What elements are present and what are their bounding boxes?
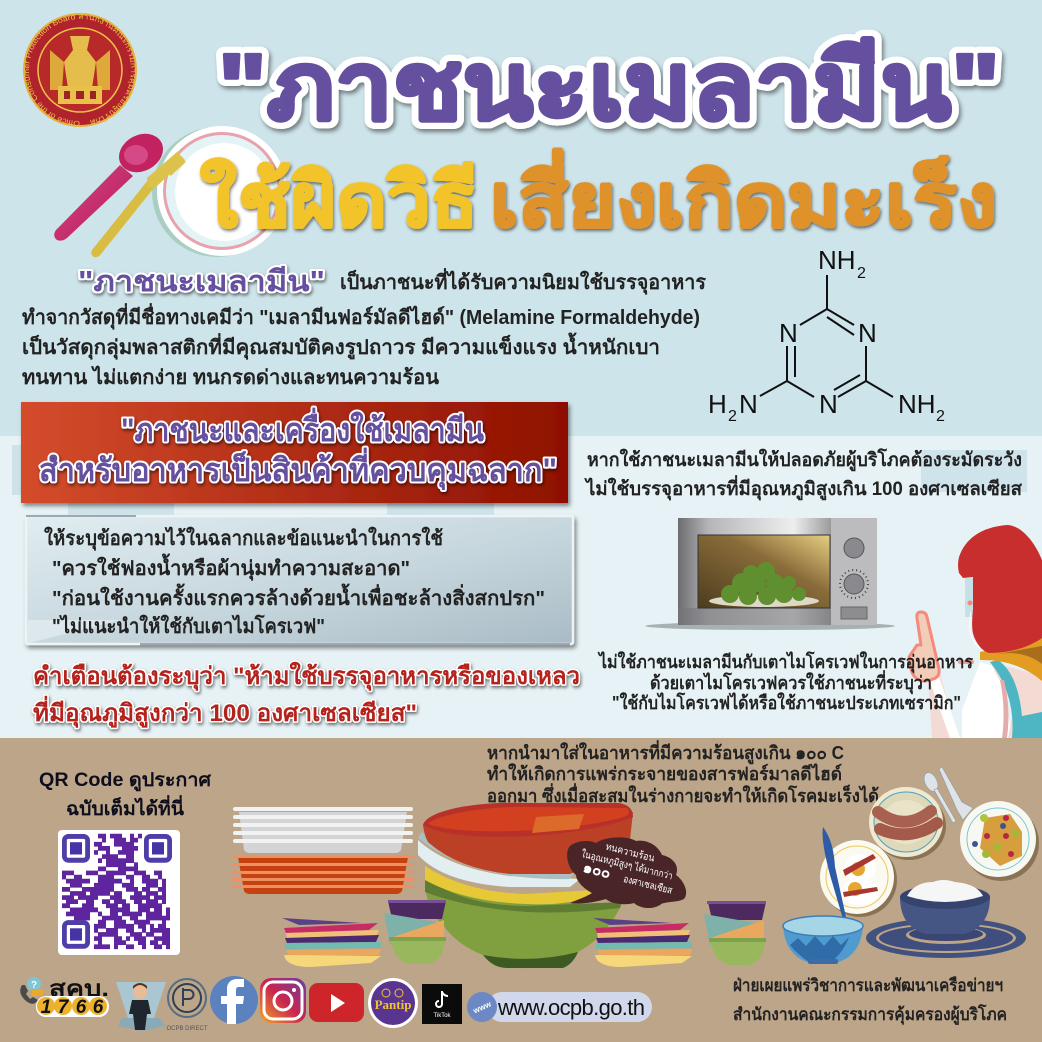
chart: melamine chemical structure: 2 — [728, 408, 737, 425]
chart: melamine chemical structure: N — [739, 389, 758, 419]
panel: red heading: สำหรับอาหารเป็นสินค้าที่ควบคุมฉลาก" — [39, 447, 557, 491]
icon: mascot man — [116, 982, 166, 1031]
chart: melamine chemical structure — [708, 245, 945, 425]
title: melamine ware: "ภาชนะเมลามีน" — [218, 34, 1000, 139]
illustration: cutlery — [921, 767, 973, 823]
panel: red heading: "ภาชนะและเครื่องใช้เมลามีน — [121, 407, 484, 448]
logo: consumer protection board seal: Office of the Consumer Protection Board สำนักงานคณะกรรมการคุ้มครองผู้บริโภค — [25, 13, 136, 126]
intro text block: ทนทาน ไม่แตกง่าย ทนกรดด่างและทนความร้อน — [22, 365, 439, 389]
illustration: rice bowl — [900, 880, 990, 934]
hotline number 1766 — [36, 996, 109, 1018]
background: top band — [0, 0, 1042, 436]
QR code — [58, 830, 180, 955]
hotline number 1766: 6 — [76, 997, 87, 1018]
illustration: large bowl stack — [418, 803, 633, 968]
illustration: blue spoon — [823, 827, 846, 919]
chart: melamine chemical structure: N — [858, 318, 877, 348]
footer: department credit: ฝ่ายเผยแพร่วิชาการและพัฒนาเครือข่ายฯ — [733, 975, 1003, 995]
caption: microwave advice — [597, 651, 973, 713]
warning text — [33, 661, 580, 729]
caption: microwave advice: ไม่ใช้ภาชนะเมลามีนกับเตาไมโครเวฟในการอุ่นอาหาร — [597, 651, 973, 674]
background: middle band — [0, 436, 1042, 738]
icon: Instagram — [260, 978, 306, 1023]
hotline number 1766: 7 — [58, 997, 70, 1018]
illustration: placemat — [866, 918, 1026, 958]
chart: melamine chemical structure: N — [819, 389, 838, 419]
warning text: ที่มีอุณภูมิสูงกว่า 100 องศาเซลเซียส" — [33, 695, 417, 729]
icon: microwave — [645, 518, 895, 630]
panel: label requirements: ให้ระบุข้อความไว้ในฉลากและข้อแนะนำในการใช้ — [44, 526, 443, 551]
background: bottom band — [0, 738, 1042, 1042]
callout: heat resistance: องศาเซลเซียส — [622, 873, 674, 897]
panel: label requirements: "ก่อนใช้งานครั้งแรกควรล้างด้วยน้ำเพื่อชะล้างสิ่งสกปรก" — [52, 583, 545, 610]
chart: melamine chemical structure: 2 — [857, 265, 866, 282]
icon: plate — [152, 126, 287, 257]
footer: department credit — [733, 975, 1007, 1026]
panel: red heading — [21, 402, 568, 503]
chart: melamine chemical structure: N — [779, 318, 798, 348]
panel: label requirements: "ไม่แนะนำให้ใช้กับเตาไมโครเวฟ" — [52, 614, 325, 638]
caption: microwave advice: ด้วยเตาไมโครเวฟควรใช้ภาชนะที่ระบุว่า — [650, 670, 932, 695]
text: cancer hazard — [487, 740, 879, 806]
callout: heat resistance: ๑๐๐ — [581, 859, 612, 882]
illustration: waffle plate — [960, 801, 1039, 881]
icon: pink spoon — [54, 126, 170, 241]
icon: YouTube — [309, 983, 364, 1022]
illustration: blue bowl — [783, 916, 863, 964]
icon: TikTok: TikTok — [433, 1013, 452, 1019]
intro keyword: "ภาชนะเมลามีน" — [78, 266, 325, 298]
chart: melamine chemical structure: NH — [898, 389, 936, 419]
callout: heat resistance — [567, 835, 686, 908]
safe use text: ไม่ใช้บรรจุอาหารที่มีอุณหภูมิสูงเกิน 100 องศาเซลเซียส — [584, 475, 1022, 501]
icon: OCPB direct logo: OCPB DIRECT — [166, 1026, 208, 1032]
illustration: right small plate stack — [593, 918, 692, 967]
text: cancer hazard: ออกมา ซึ่งเมื่อสะสมในร่างกายจะทำให้เกิดโรคมะเร็งได้ — [487, 783, 879, 806]
hotline number 1766: 1 — [41, 997, 51, 1018]
illustration: left cups — [384, 900, 446, 964]
text: hotline name: สคบ. — [49, 976, 109, 1001]
safe use text: หากใช้ภาชนะเมลามีนให้ปลอดภัยผู้บริโภคต้องระมัดระวัง — [587, 448, 1022, 472]
intro text block: เป็นวัสดุกลุ่มพลาสติกที่มีคุณสมบัติคงรูปถาวร มีความแข็งแรง น้ำหนักเบา — [22, 332, 660, 361]
QR heading — [39, 770, 212, 820]
callout: heat resistance: ทนความร้อน — [604, 841, 656, 865]
illustration: sausage plate — [869, 787, 946, 860]
icon: OCPB direct logo — [166, 979, 208, 1032]
chart: melamine chemical structure: 2 — [936, 408, 945, 425]
website link: www.ocpb.go.th — [497, 995, 645, 1020]
text: cancer hazard: ทำให้เกิดการแพร่กระจายของสารฟอร์มาลดีไฮด์ — [487, 763, 842, 784]
icon: Pantip — [368, 978, 418, 1028]
intro text block: เป็นภาชนะที่ได้รับความนิยมใช้บรรจุอาหาร — [340, 267, 706, 295]
QR heading: QR Code ดูประกาศ — [39, 770, 212, 792]
footer: department credit: สำนักงานคณะกรรมการคุ้มครองผู้บริโภค — [733, 1004, 1007, 1026]
title: melamine ware: "ภาชนะเมลามีน" — [218, 34, 1000, 139]
illustration: left small plate stack — [282, 918, 381, 967]
decorative pale blocks — [12, 445, 1027, 550]
illustration: woman pointing — [909, 525, 1042, 738]
icon: Pantip: Pantip — [375, 997, 411, 1012]
QR heading: ฉบับเต็มได้ที่นี่ — [66, 795, 184, 820]
warning text: คำเตือนต้องระบุว่า "ห้ามใช้บรรจุอาหารหรือของเหลว — [33, 661, 580, 692]
panel: label requirements: "ควรใช้ฟองน้ำหรือผ้านุ่มทำความสะอาด" — [52, 553, 410, 581]
hotline number 1766: 6 — [93, 997, 104, 1018]
website link: www — [471, 999, 493, 1016]
icon: TikTok — [422, 984, 462, 1024]
icon: yellow fork — [91, 152, 185, 257]
icon: hotline phone: ? — [31, 980, 37, 991]
illustration: orange tray stack — [232, 855, 414, 894]
intro text block: ทำจากวัสดุที่มีชื่อทางเคมีว่า "เมลามีนฟอร์มัลดีไฮด์" (Melamine Formaldehyde) — [22, 302, 700, 330]
subtitle: cancer risk: เสี่ยงเกิดมะเร็ง — [490, 148, 997, 242]
intro text block — [22, 266, 706, 389]
safe use text — [584, 448, 1022, 501]
subtitle: used wrongly: ใช้ผิดวิธี — [200, 157, 478, 242]
text: cancer hazard: หากนำมาใส่ในอาหารที่มีความร้อนสูงเกิน ๑๐๐ C — [487, 740, 844, 765]
chart: melamine chemical structure: H — [708, 389, 727, 419]
chart: melamine chemical structure: NH — [818, 245, 856, 275]
callout: heat resistance: ในอุณหภูมิสูงๆ ได้มากกว่า — [580, 848, 674, 882]
panel: label requirements — [26, 515, 573, 646]
website link — [467, 992, 652, 1022]
icon: Facebook — [210, 976, 258, 1024]
illustration: right cups — [704, 901, 766, 965]
icon: hotline phone — [20, 977, 43, 1004]
caption: microwave advice: "ใช้กับไมโครเวฟได้หรือใช้ภาชนะประเภทเซรามิก" — [612, 692, 961, 713]
illustration: white tray stack — [233, 807, 413, 853]
illustration: bacon and egg plate — [820, 840, 897, 917]
